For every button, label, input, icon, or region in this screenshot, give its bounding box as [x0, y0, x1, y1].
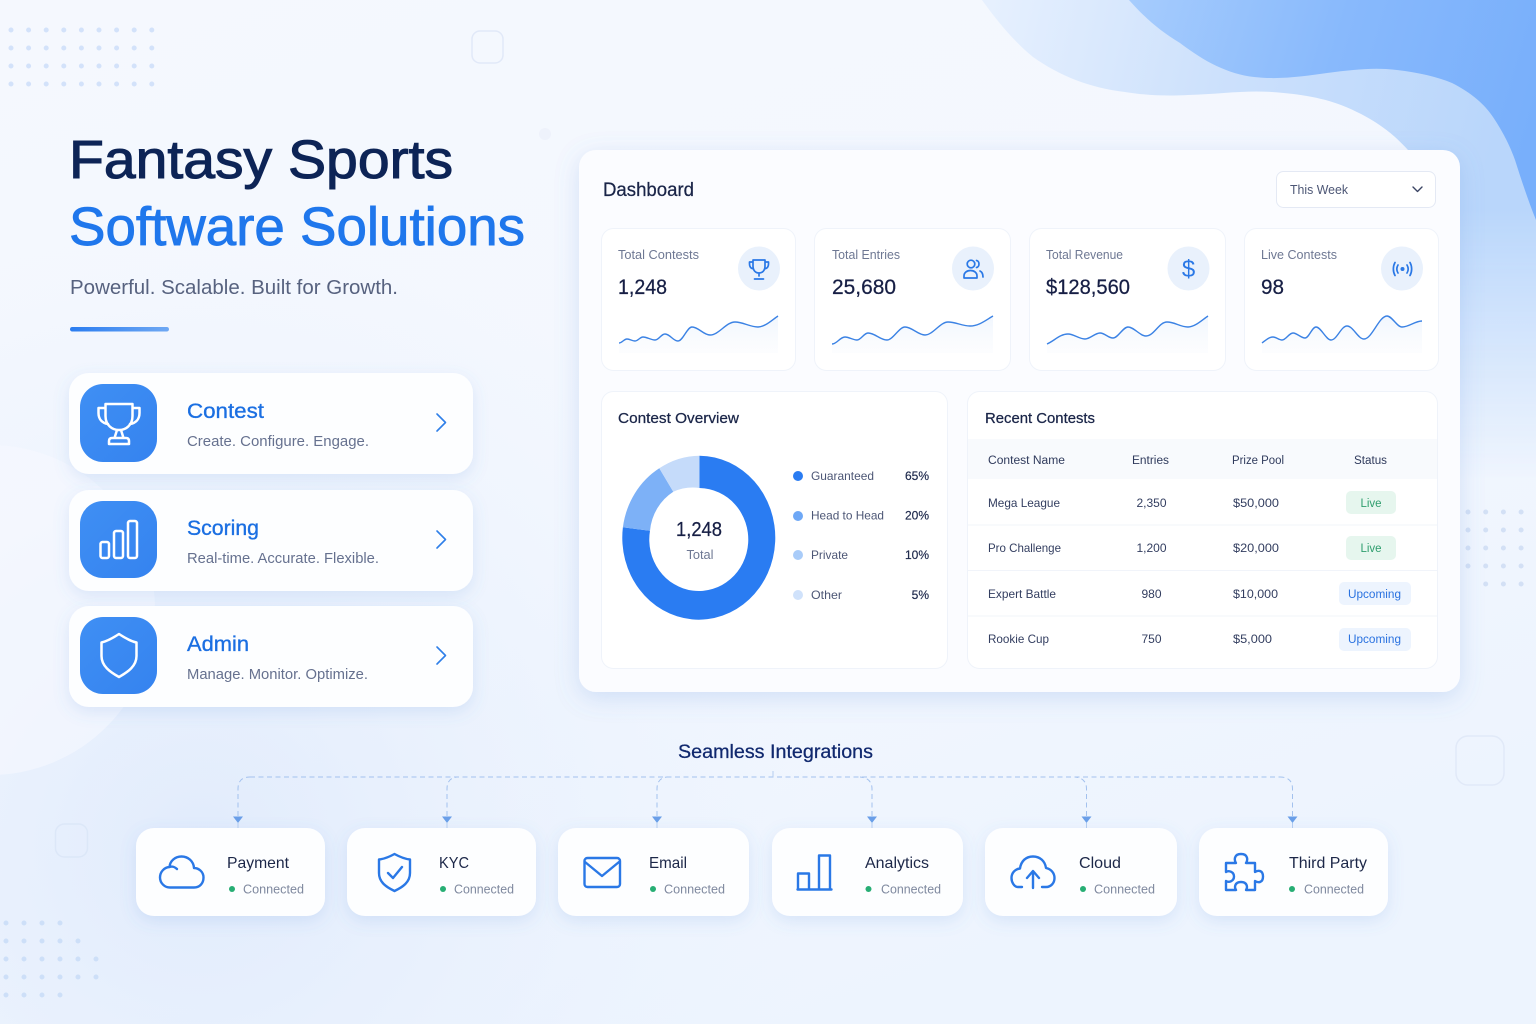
- panel: contest overview: [602, 392, 948, 668]
- table header: Entries: [1132, 455, 1169, 467]
- overview heading: Contest Overview: [618, 410, 739, 427]
- integrations heading: Seamless Integrations: [678, 742, 873, 763]
- row: mega league: 2,350: [1136, 496, 1167, 510]
- integration card: payment: Connected: [243, 882, 304, 896]
- stat card: total contests: Total Contests: [618, 248, 699, 262]
- icon: cloud: [160, 856, 204, 888]
- row: rookie cup: 750: [1141, 632, 1162, 646]
- row: expert battle: Upcoming: [1348, 589, 1401, 601]
- icon: shield check: [379, 854, 410, 891]
- row: mega league: Live: [1360, 498, 1382, 510]
- dot grid: bottom left: [6, 923, 98, 995]
- feature card: scoring: [69, 490, 473, 591]
- recent contests heading: Recent Contests: [985, 410, 1095, 427]
- stat card: total contests: [602, 228, 796, 370]
- row: pro challenge: $20,000: [1233, 541, 1279, 555]
- title: [69, 130, 525, 257]
- subtitle: Powerful. Scalable. Built for Growth.: [70, 277, 398, 299]
- stat card: live contests: Live Contests: [1261, 248, 1337, 262]
- stat card: live contests: [1244, 228, 1438, 370]
- integration card: cloud: Connected: [1094, 882, 1155, 896]
- sparkline: [1047, 316, 1208, 353]
- dashboard heading: Dashboard: [603, 180, 694, 201]
- icon: dollar badge: $: [1182, 256, 1195, 283]
- icon: shield: [80, 617, 157, 694]
- icon: bars: [80, 501, 157, 578]
- legend: 20%: [905, 508, 929, 522]
- integration connectors: [233, 771, 1298, 828]
- decorative outlined squares: [56, 31, 1504, 857]
- row: mega league: [988, 491, 1396, 514]
- row: pro challenge: Pro Challenge: [988, 541, 1061, 555]
- legend: 65%: [905, 469, 929, 483]
- integration card: third party: [1199, 828, 1388, 916]
- integration card: third party: Third Party: [1289, 855, 1367, 872]
- icon: chevron: [437, 414, 446, 431]
- row: mega league: $50,000: [1233, 496, 1279, 510]
- stat card: total revenue: $128,560: [1046, 276, 1130, 299]
- legend: Head to Head: [811, 508, 884, 522]
- icon: chevron: [437, 647, 446, 664]
- integration card: kyc: Connected: [454, 882, 514, 896]
- scoring description: Real-time. Accurate. Flexible.: [187, 550, 379, 567]
- sparkline: [832, 316, 993, 353]
- dot grid: right: [1468, 512, 1525, 584]
- contest description: Create. Configure. Engage.: [187, 433, 369, 450]
- row: expert battle: $10,000: [1233, 587, 1278, 601]
- icon: puzzle: [1226, 854, 1263, 890]
- row: expert battle: Expert Battle: [988, 587, 1056, 601]
- integration card: kyc: [347, 828, 536, 916]
- panel: dashboard: [579, 150, 1460, 692]
- icon: live signal badge: [1381, 246, 1423, 290]
- legend: 5%: [912, 588, 929, 602]
- integration card: third party: Connected: [1304, 882, 1364, 896]
- admin description: Manage. Monitor. Optimize.: [187, 666, 368, 683]
- dot grid: top left: [11, 30, 155, 84]
- icon: trophy: [80, 384, 157, 462]
- stat card: total revenue: Total Revenue: [1046, 248, 1123, 262]
- integration card: kyc: KYC: [439, 855, 469, 872]
- stat card: live contests: 98: [1261, 276, 1284, 299]
- integration card: email: Connected: [664, 882, 725, 896]
- contest label: Contest: [187, 399, 264, 423]
- sparkline: [1262, 316, 1422, 353]
- icon: mail: [584, 858, 620, 887]
- title accent bar: [70, 327, 169, 332]
- row: rookie cup: Rookie Cup: [988, 632, 1049, 646]
- row: pro challenge: 1,200: [1136, 541, 1167, 555]
- stat card: total entries: [814, 228, 1010, 370]
- stat card: total revenue: [1030, 228, 1226, 370]
- integration card: cloud: Cloud: [1079, 855, 1121, 872]
- row: rookie cup: $5,000: [1233, 632, 1272, 646]
- stat card: total entries: Total Entries: [832, 248, 900, 262]
- integration card: email: [558, 828, 749, 916]
- integration card: analytics: [772, 828, 963, 916]
- icon: dollar badge: [1168, 246, 1210, 290]
- legend: [793, 469, 929, 602]
- stat card: total entries: 25,680: [832, 276, 896, 299]
- table header: Contest Name: [988, 455, 1065, 467]
- admin label: Admin: [187, 632, 249, 656]
- period dropdown: [1276, 172, 1436, 208]
- feature card: admin: [69, 606, 473, 707]
- period dropdown: This Week: [1290, 182, 1348, 197]
- legend: Other: [811, 588, 842, 602]
- row: rookie cup: Upcoming: [1348, 634, 1401, 646]
- table header: Status: [1354, 455, 1387, 467]
- row: expert battle: 980: [1141, 587, 1162, 601]
- panel: recent contests: [968, 392, 1438, 668]
- sparkline: [619, 316, 778, 353]
- legend: Guaranteed: [811, 469, 874, 483]
- donut total: 1,248: [676, 519, 722, 541]
- row: pro challenge: [988, 536, 1396, 560]
- feature card: contest: [69, 373, 473, 474]
- table header: Prize Pool: [1232, 455, 1284, 467]
- icon: users badge: [952, 246, 994, 290]
- icon: chevron: [437, 531, 446, 548]
- integration card: analytics: Connected: [881, 882, 941, 896]
- scoring label: Scoring: [187, 516, 259, 540]
- donut total: Total: [686, 548, 714, 562]
- donut chart: [622, 456, 775, 620]
- stat card: total contests: 1,248: [618, 276, 667, 299]
- donut total: [676, 519, 722, 562]
- title: Software Solutions: [69, 197, 525, 257]
- row: rookie cup: [988, 628, 1411, 651]
- integration card: payment: Payment: [227, 855, 290, 872]
- integration card: email: Email: [649, 855, 687, 872]
- integration card: analytics: Analytics: [865, 855, 929, 872]
- title: Fantasy Sports: [69, 130, 453, 190]
- row: mega league: Mega League: [988, 496, 1060, 510]
- integration card: payment: [136, 828, 325, 916]
- table header: [968, 439, 1437, 479]
- icon: bar chart: [798, 856, 832, 890]
- icon: cloud upload: [1012, 856, 1054, 888]
- icon: trophy badge: [738, 246, 780, 290]
- legend: Private: [811, 548, 848, 562]
- row: pro challenge: Live: [1360, 543, 1382, 555]
- row: expert battle: [988, 582, 1411, 605]
- integration card: cloud: [985, 828, 1177, 916]
- legend: 10%: [905, 548, 929, 562]
